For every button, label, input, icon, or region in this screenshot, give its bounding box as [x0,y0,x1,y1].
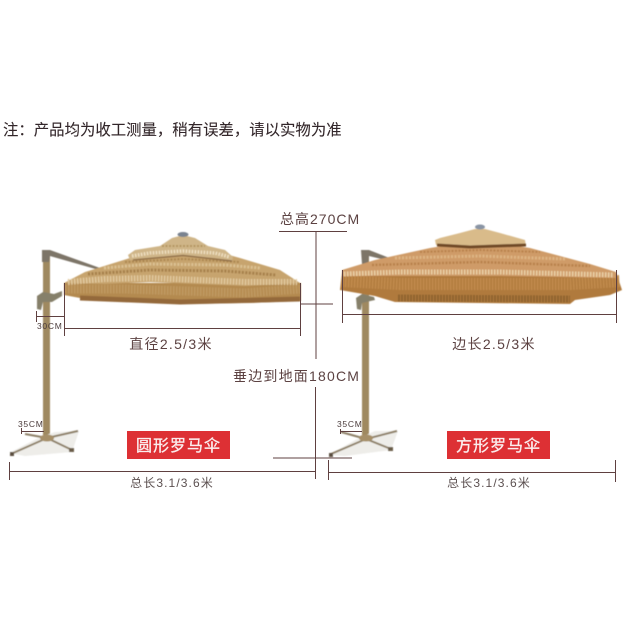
cantilever arm [42,250,100,270]
dimension lines [9,231,617,482]
label: 35cm square: 35CM [337,419,362,429]
umbrella: square [329,224,622,457]
badge: square umbrella [447,431,550,459]
label: 35cm round: 35CM [18,419,43,429]
base: cross stand [329,431,398,457]
canopy main roof [342,240,616,278]
badge: round umbrella [127,431,230,459]
canopy top tier [435,229,526,248]
badge: square umbrella: 方形罗马伞 [456,437,541,455]
finial [178,232,188,237]
hub [356,294,375,310]
cantilever arm [361,250,392,264]
canopy lower fringe [340,272,622,304]
label: square side: 边长2.5/3米 [452,336,536,352]
label: total length round: 总长3.1/3.6米 [130,476,214,490]
label: hem to ground: 垂边到地面180CM [233,368,360,384]
label: total length square: 总长3.1/3.6米 [447,476,531,490]
pole [43,251,50,435]
thatch rows [344,272,614,275]
hub [37,291,62,310]
base: cross stand [9,431,79,456]
badge: round umbrella: 圆形罗马伞 [136,437,221,455]
canopy main roof [64,240,300,286]
note text: 注：产品均为收工测量，稍有误差，请以实物为准 [3,121,342,139]
label: round diameter: 直径2.5/3米 [129,336,213,352]
pole [362,251,369,435]
label: 30cm: 30CM [37,321,62,331]
canopy top tier [128,235,233,261]
thatch rows [68,278,297,282]
canopy lower fringe [64,283,301,304]
umbrella: round [9,232,301,456]
label: total height: 总高270CM [280,211,360,227]
finial [475,224,485,230]
